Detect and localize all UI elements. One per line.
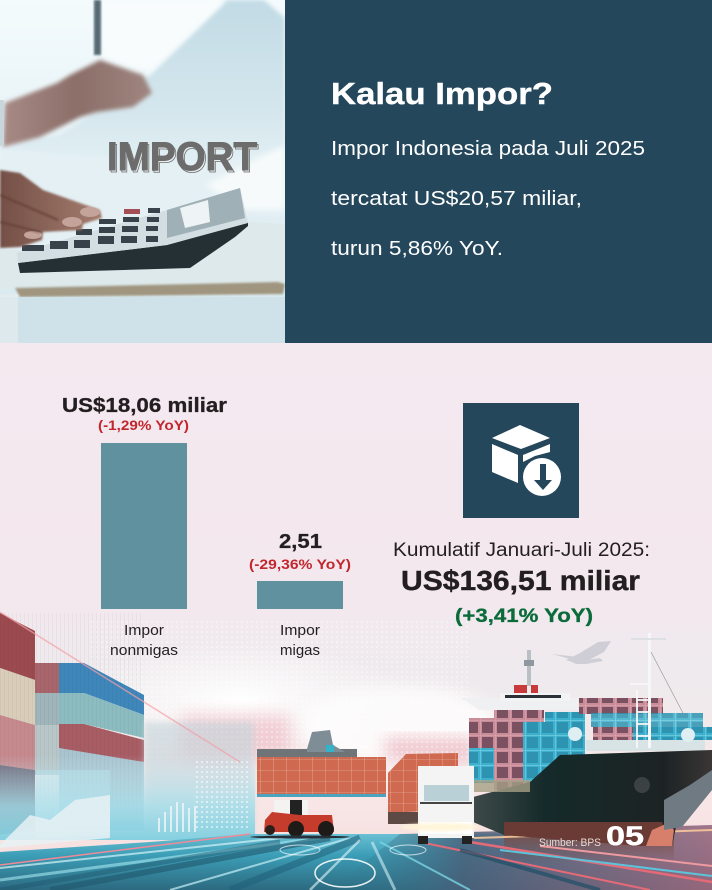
- IMPORT label on photo: IMPORT: [108, 137, 258, 181]
- bar: nonmigas: US$18,06 miliar: [62, 394, 227, 417]
- bar: nonmigas: [62, 394, 227, 659]
- intro text: tercatat US$20,57 miliar,: [331, 187, 582, 210]
- forklift with container: [250, 730, 386, 838]
- bar: nonmigas: nonmigas: [110, 643, 178, 659]
- bar: migas: [249, 530, 351, 659]
- IMPORT label on photo: IMPORT: [107, 135, 257, 179]
- notebook: [0, 222, 285, 256]
- photo: hands with calculator: [0, 0, 285, 343]
- ship: [461, 633, 712, 846]
- cumulative stats: US$136,51 miliar: [401, 565, 640, 596]
- lower hand: [0, 170, 102, 248]
- navy panel: [285, 0, 712, 343]
- pen: [94, 0, 101, 55]
- calculator: [17, 188, 248, 273]
- intro text: [331, 137, 645, 260]
- container stacks: [0, 612, 255, 848]
- page number: 05: [606, 821, 644, 851]
- bar: nonmigas: (-1,29% YoY): [98, 417, 189, 433]
- airplane: [552, 641, 611, 664]
- cumulative stats: Kumulatif Januari-Juli 2025:: [393, 540, 650, 561]
- bar: migas: migas: [280, 643, 320, 659]
- bar: migas: Impor: [280, 623, 320, 639]
- road: [0, 825, 712, 890]
- bar: nonmigas: Impor: [124, 623, 164, 639]
- bar: migas: 2,51: [279, 530, 322, 553]
- heading: Kalau Impor?: [331, 76, 553, 111]
- intro text: Impor Indonesia pada Juli 2025: [331, 137, 645, 160]
- scene: port and logistics illustration: [0, 612, 712, 890]
- calculator keys: [22, 208, 160, 251]
- cumulative stats: [393, 540, 650, 627]
- icon: box with download arrow: [463, 403, 579, 518]
- cumulative stats: (+3,41% YoY): [455, 605, 593, 627]
- sky glow: [70, 620, 500, 765]
- background: [0, 343, 712, 890]
- source: Sumber: BPS: [539, 837, 601, 849]
- bar: migas: (-29,36% YoY): [249, 556, 351, 572]
- intro text: turun 5,86% YoY.: [331, 237, 503, 260]
- bar chart: impor: [62, 394, 351, 659]
- desk sheet: [0, 150, 285, 253]
- trailer and truck: [388, 753, 480, 844]
- paper document: [16, 0, 285, 150]
- upper hand: [3, 60, 152, 147]
